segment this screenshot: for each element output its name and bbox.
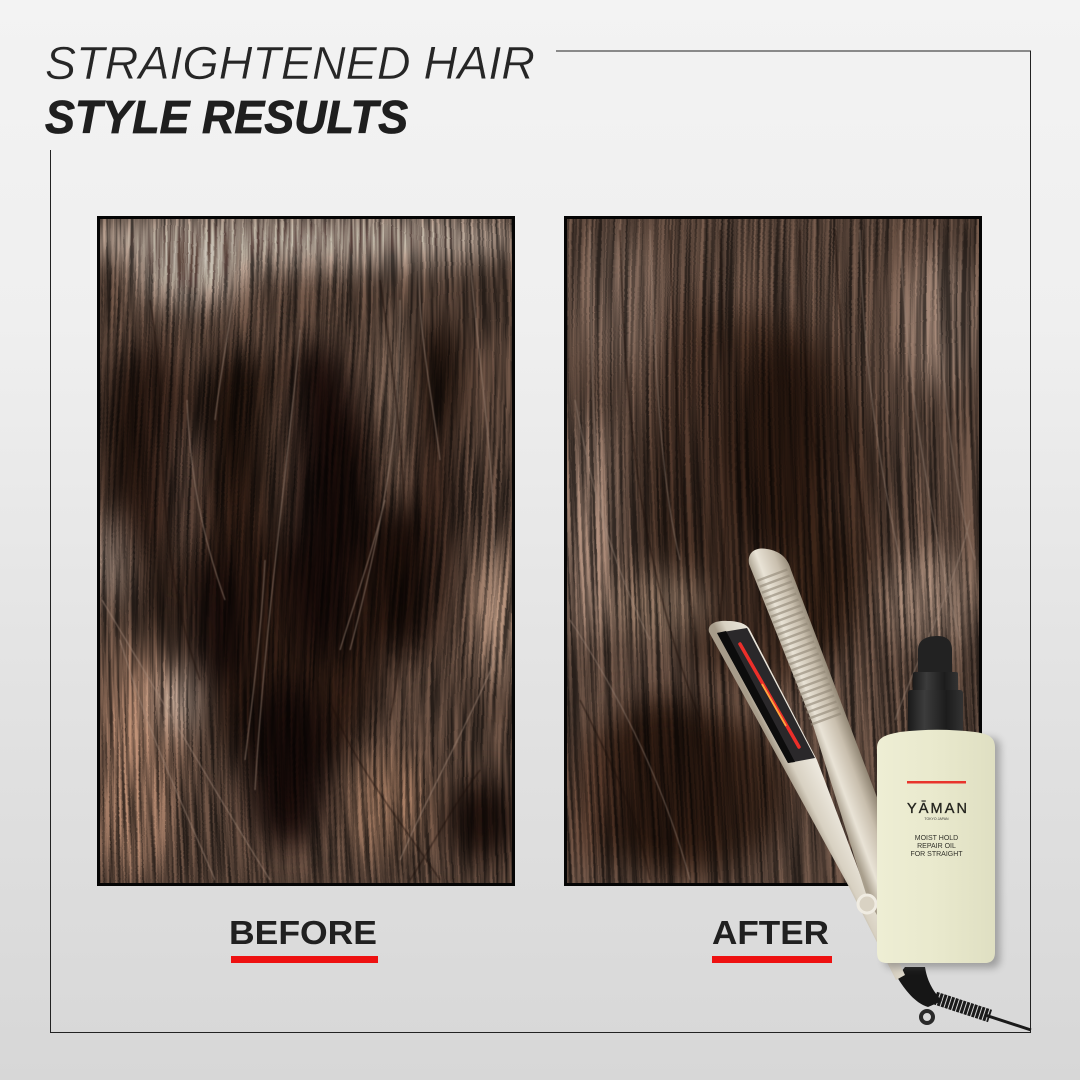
hair strands (570, 230, 975, 880)
plate dark edge (717, 631, 795, 763)
brand origin: TOKYO JAPAN (924, 817, 949, 821)
label: before: BEFORE (229, 914, 377, 951)
icon: hair straightener (709, 549, 1031, 1030)
icon: oil bottle (877, 636, 1000, 968)
title line: style results: STYLE RESULTS (45, 91, 408, 143)
red light glow (762, 684, 786, 726)
cord (897, 967, 1031, 1030)
product name: REPAIR OIL (917, 843, 956, 850)
upper arm body (749, 549, 880, 920)
bottle red line (907, 781, 966, 784)
product name: FOR STRAIGHT (910, 851, 963, 858)
title (45, 37, 535, 143)
pump head (918, 636, 952, 674)
pump neck (913, 672, 958, 692)
panel: after hair photo (564, 216, 982, 886)
heating plate (717, 628, 815, 763)
bottle shadow (884, 738, 1000, 968)
label: after (712, 914, 832, 963)
title line: straightened hair: STRAIGHTENED HAIR (45, 37, 535, 89)
label: after: AFTER (712, 914, 829, 951)
lower arm body (709, 621, 905, 980)
brand logo: YĀMAN (907, 801, 967, 817)
product name: MOIST HOLD (915, 835, 958, 842)
bottle body (877, 730, 995, 963)
label: before (229, 914, 378, 963)
panel: before hair photo (97, 216, 515, 886)
grip ribs (772, 574, 827, 722)
hinge (858, 895, 876, 913)
collar (908, 690, 963, 732)
hair strands (102, 240, 495, 880)
red light strip (740, 644, 799, 747)
product name (910, 835, 963, 858)
